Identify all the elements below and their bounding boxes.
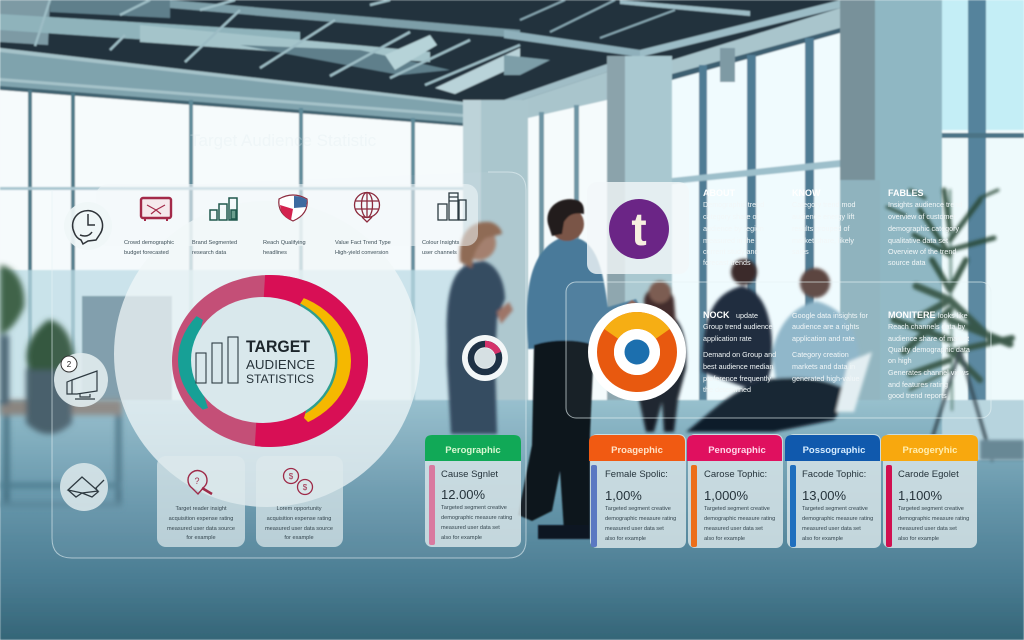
- card: location insight: acquisition expense rating: [169, 516, 233, 522]
- text column: middle: markets and data in: [792, 362, 855, 371]
- text column: nock: application rate: [703, 334, 752, 343]
- stat card: green: measured user data set: [441, 525, 500, 531]
- stat card: amber: [881, 434, 978, 548]
- icon tile: purple letter: t: [631, 203, 647, 255]
- text column: monitor: Reach channels data by: [888, 322, 966, 331]
- text column: fables: FABLES: [888, 188, 924, 198]
- text column: about: [703, 188, 764, 267]
- card: location insight: measured user data source: [167, 526, 235, 532]
- columns and right windows: [504, 30, 640, 57]
- icon captions: Brand Segmented: [192, 240, 237, 246]
- stat card: blue: [785, 434, 881, 548]
- text column: nock: Group trend audience: [703, 322, 773, 331]
- text column: know: results grouped of: [792, 224, 850, 233]
- stat card: amber: Targeted segment creative: [898, 506, 964, 512]
- text column: middle: application and rate: [792, 334, 855, 343]
- stat card: amber: Praogeryhic: [903, 445, 957, 456]
- stat card: blue: 13,00%: [802, 488, 847, 503]
- icon captions: Reach Qualifying: [263, 240, 306, 246]
- icon captions: research data: [192, 250, 227, 256]
- text column: nock: update: [736, 311, 758, 320]
- text column: fables: qualitative data set: [888, 236, 948, 245]
- text column: nock: the determined: [703, 385, 751, 394]
- stat card: green: Cause Sgnlet: [441, 469, 498, 480]
- text column: monitor: and features rating: [888, 380, 948, 389]
- left furniture and plants: [0, 265, 122, 507]
- text column: nock: NOCK: [703, 310, 730, 320]
- text column: nock: Demand on Group and: [703, 350, 776, 359]
- stat card: amber: Carode Egolet: [898, 469, 959, 480]
- text column: monitor: Quality demographic data: [888, 345, 970, 354]
- left beam: [0, 48, 463, 125]
- stat card: orange: 1,00%: [605, 488, 642, 503]
- stat card: amber: demographic measure rating: [898, 516, 969, 522]
- text column: about: current study and: [703, 247, 759, 256]
- text column: nock: [703, 310, 776, 394]
- center label: STATISTICS: [246, 372, 314, 386]
- donut chart: target audience statistics: [172, 275, 368, 447]
- stat card: magenta: 1,000%: [704, 488, 749, 503]
- stat card: orange: [589, 434, 686, 548]
- large translucent glass circle: [114, 201, 420, 507]
- text block: upper right columns: [703, 188, 962, 267]
- stat card: magenta: Carose Tophic:: [704, 469, 767, 480]
- text column: middle: Category creation: [792, 350, 849, 359]
- left rail: monitor badge: 2: [67, 360, 72, 369]
- text column: monitor: on high: [888, 356, 912, 365]
- text column: monitor: Generates channel views: [888, 368, 969, 377]
- icon captions: budget forecasted: [124, 250, 169, 256]
- icon captions: Colour Insights: [422, 240, 460, 246]
- text column: fables: Overview of the trend: [888, 247, 956, 256]
- stat card: magenta: [687, 434, 783, 548]
- text column: know: KNOW: [792, 188, 821, 198]
- text column: know: [792, 188, 856, 256]
- icon: globe pin: [354, 192, 380, 222]
- stat card: orange: demographic measure rating: [605, 516, 676, 522]
- card: budget insight: for example: [284, 535, 314, 541]
- seated people: [638, 259, 872, 432]
- text column: monitor: looks like: [938, 311, 968, 320]
- stat card: orange: measured user data set: [605, 526, 664, 532]
- icon: coins: $: [303, 483, 308, 492]
- stat card: magenta: Targeted segment creative: [704, 506, 770, 512]
- stat card: blue: also for example: [802, 536, 843, 542]
- text column: monitor: good trend reports: [888, 391, 947, 400]
- stat card: orange: Proagephic: [611, 445, 663, 456]
- panel: top icon strip: [64, 184, 478, 256]
- stat card: green: also for example: [441, 535, 482, 541]
- icon: monitor message: [141, 198, 171, 221]
- text column: fables: [888, 188, 962, 267]
- left rail: trend badge: [60, 463, 108, 511]
- text column: about: measured in the: [703, 236, 755, 245]
- card: budget insight: [256, 456, 343, 547]
- icon: bar chart: [210, 198, 237, 220]
- card: budget insight: measured user data source: [265, 526, 333, 532]
- stat card: blue: Facode Tophic:: [802, 469, 866, 480]
- icon captions: Value Fact Trend Type: [335, 240, 391, 246]
- text column: monitor: audience share of market: [888, 334, 969, 343]
- icon captions: High-yield conversion: [335, 250, 388, 256]
- panel: left glass frame: [52, 172, 526, 558]
- text column: know: Category trend mod: [792, 200, 856, 209]
- icon: segmented shield: [279, 195, 307, 221]
- text column: nock: preference frequently: [703, 374, 771, 383]
- stat card: green: 12.00%: [441, 487, 486, 502]
- distant buildings: [0, 270, 463, 400]
- stat card: green: demographic measure rating: [441, 515, 512, 521]
- text column: about: audience by region: [703, 224, 764, 233]
- left windows: [0, 88, 463, 410]
- stat card: blue: measured user data set: [802, 526, 861, 532]
- stat card: green: Targeted segment creative: [441, 505, 507, 511]
- stat card: orange: also for example: [605, 536, 646, 542]
- text column: about: Demographic trend: [703, 200, 764, 209]
- stat card: blue: Possographic: [803, 445, 865, 456]
- text column: fables: source data: [888, 258, 926, 267]
- stat card: amber: measured user data set: [898, 526, 957, 532]
- man: [518, 199, 640, 539]
- floor: [0, 400, 1024, 640]
- card: location insight: [157, 456, 245, 547]
- text column: know: sales: [792, 247, 809, 256]
- stat card: green: [425, 435, 521, 547]
- card: budget insight: Lorem opportunity: [276, 506, 322, 512]
- stat card: magenta: measured user data set: [704, 526, 763, 532]
- text column: fables: Insights audience trend: [888, 200, 962, 209]
- card: location insight: Target reader insight: [176, 506, 227, 512]
- card: budget insight: acquisition expense rating: [267, 516, 331, 522]
- icon: coins: $: [289, 472, 294, 481]
- text column: fables: overview of customer: [888, 212, 957, 221]
- icon captions: user channels: [422, 250, 457, 256]
- faint panel title: Target Audience Statistic: [190, 131, 377, 150]
- text column: about: category share of: [703, 212, 759, 221]
- right plant and tripod: [887, 190, 1024, 460]
- stat card: magenta: also for example: [704, 536, 745, 542]
- icon captions: [124, 240, 460, 256]
- text column: middle: audience are a rights: [792, 322, 860, 331]
- stat card: blue: demographic measure rating: [802, 516, 873, 522]
- center label: AUDIENCE: [246, 357, 315, 372]
- text column: middle: [792, 311, 869, 383]
- stat card: green: Perographic: [445, 445, 501, 456]
- icon: buildings: [438, 193, 466, 220]
- icon: small ring on woman: [462, 335, 508, 381]
- left rail: monitor badge: [54, 353, 108, 407]
- text column: middle: Google data insights for: [792, 311, 869, 320]
- text column: nock: best audience median: [703, 362, 773, 371]
- stat card: magenta: demographic measure rating: [704, 516, 775, 522]
- text column: fables: demographic category: [888, 224, 960, 233]
- center label: [196, 337, 315, 386]
- text column: know: market share, likely: [792, 236, 854, 245]
- stat card: blue: Targeted segment creative: [802, 506, 868, 512]
- icon captions: Crowd demographic: [124, 240, 174, 246]
- icon: clock badge: [64, 202, 112, 250]
- woman: [447, 222, 513, 434]
- icon captions: headlines: [263, 250, 287, 256]
- donut icon: orange target: [588, 303, 686, 401]
- stat card: amber: also for example: [898, 536, 939, 542]
- panel: right glass frame: [566, 282, 991, 418]
- text block: lower right columns: [703, 310, 970, 400]
- stat card: orange: Targeted segment creative: [605, 506, 671, 512]
- text column: about: ABOUT: [703, 188, 735, 198]
- center label: TARGET: [246, 337, 311, 356]
- stat card: amber: 1,100%: [898, 488, 943, 503]
- icon tile: purple letter: [587, 182, 689, 274]
- stat card: magenta: Penographic: [708, 445, 766, 456]
- text column: about: forecast trends: [703, 258, 751, 267]
- card: location insight: for example: [186, 535, 216, 541]
- icon: coins: [284, 468, 312, 494]
- icon: magnifier pin: ?: [194, 476, 200, 486]
- text column: monitor: [888, 310, 970, 400]
- stat card: orange: Female Spolic:: [605, 469, 668, 480]
- text column: middle: generated high-value: [792, 374, 860, 383]
- text column: know: audience energy lift: [792, 212, 854, 221]
- text column: monitor: MONITERE: [888, 310, 936, 320]
